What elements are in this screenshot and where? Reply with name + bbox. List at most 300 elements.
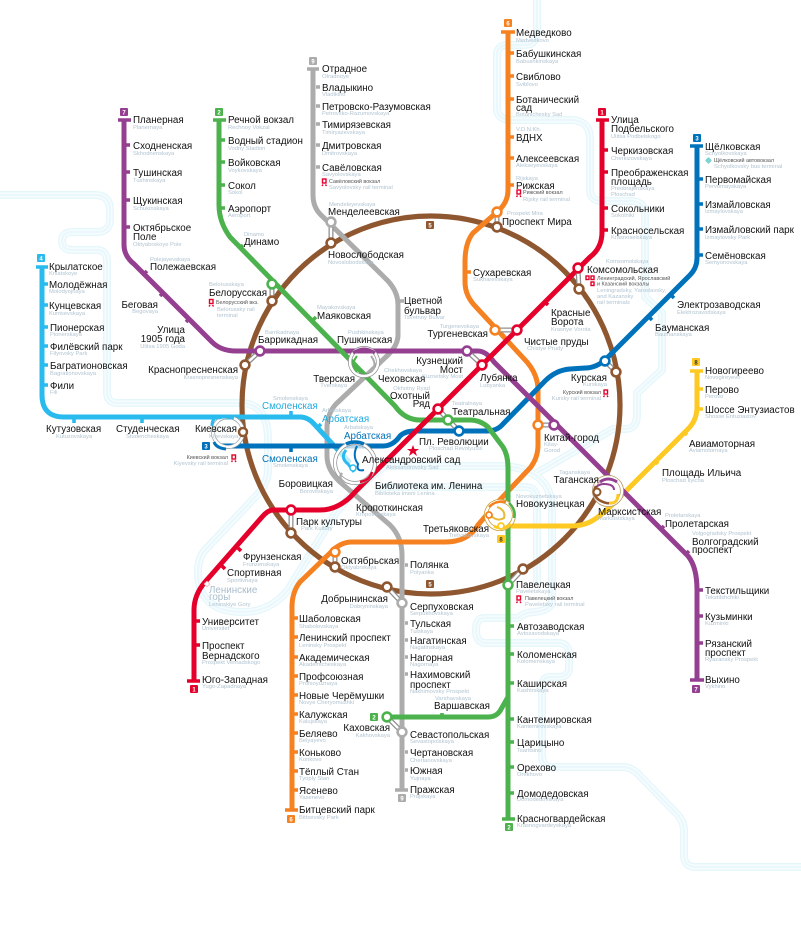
stations: line 3: Первомайская: [705, 175, 771, 186]
stations: line 6: Yasenevo: [299, 795, 324, 801]
stations: line 8: Ploschad Ilyicha: [662, 478, 705, 484]
stations: line 1: Чистые пруды: [524, 337, 589, 348]
stations: line 6: Китай-город: [544, 433, 599, 444]
stations: line 7 north: Тушинская: [133, 168, 182, 179]
stations: line 7 north: Поле: [133, 232, 157, 243]
stations: line 5: Добрынинская: [321, 594, 388, 605]
stations: line 7 centre and south-east: Мост: [440, 365, 464, 376]
stations: line 3: Izmaylovskaya: [705, 209, 744, 215]
stations: line 6: Новые Черёмушки: [299, 691, 384, 702]
stations: line 1: Preobrajenskaya: [611, 186, 655, 192]
stations: line 6: Проспект Мира: [502, 217, 572, 228]
stations: line 4: Смоленская: [262, 401, 318, 412]
stations: line 6: сад: [516, 103, 532, 114]
stations: line 2 south: [517, 622, 606, 829]
line number badges: 3: [695, 136, 699, 142]
stations: line 8: Марксистская: [598, 507, 661, 518]
stations: line 7 centre and south-east: проспект: [705, 648, 746, 659]
stations: line 3: [262, 142, 795, 469]
stations: line 7 centre and south-east: Taganskaya: [559, 470, 591, 476]
stations: line 9: Южная: [410, 766, 443, 777]
stations: line 7 north: Schukinskaya: [133, 206, 170, 212]
stations: line 7 centre and south-east: Kuznetsky Most: [422, 374, 463, 380]
stations: line 2: Тверская: [313, 374, 355, 385]
stations: line 5: Новослободская: [328, 250, 404, 261]
stations: line 4: Studencheskaya: [126, 434, 170, 440]
stations: line 2: Белорусская: [209, 288, 267, 299]
stations: line 6: Беляево: [299, 729, 338, 740]
stations: line 1: Фрунзенская: [243, 552, 302, 563]
stations: line 8: Авиамоторная: [689, 439, 755, 450]
stations: line 4: Kiyevsky rail terminal: [174, 461, 228, 467]
stations: line 9: Каховская: [343, 723, 390, 734]
stations: line 2 south: Царицыно: [517, 738, 565, 749]
line number badges: 5: [428, 224, 432, 230]
stations: line 2: Rechnoy Vokzal: [228, 125, 270, 131]
stations: line 1: Университет: [202, 617, 260, 628]
stations: line 2 south: Каширская: [517, 679, 567, 690]
stations: line 3: Щёлковская: [705, 142, 760, 153]
stations: line 1: площадь: [611, 177, 652, 188]
stations: line 7 centre and south-east: Tekstilshchiki: [705, 595, 739, 601]
stations: line 3: Kursky rail terminal: [552, 396, 601, 402]
stations: line 6: Botanichesky Sad: [516, 112, 562, 118]
stations: line 2: Teatralnaya: [452, 401, 483, 407]
stations: line 1: Universitet: [202, 626, 230, 632]
stations: line 9: Серпуховская: [410, 602, 474, 613]
stations: line 1: Komsomolskaya: [606, 259, 649, 265]
stations: line 7 north: Begovaya: [132, 309, 159, 315]
stations: line 6: Tretyakovskaya: [449, 533, 490, 539]
stations: line 3: Ploschad Revolyutsii: [429, 446, 482, 452]
stations: line 1: Вернадского: [202, 651, 260, 662]
stations: line 7 centre and south-east: Таганская: [554, 475, 599, 486]
stations: line 1: [202, 115, 688, 690]
line number badges: 8: [694, 360, 698, 366]
stations: line 2: [209, 115, 585, 591]
stations: line 9: Tulskaya: [410, 629, 434, 635]
stations: line 9: Дмитровская: [322, 141, 381, 152]
stations: line 2 south: Krasnogvardeyskaya: [517, 823, 572, 829]
stations: line 9: Prajskaya: [410, 794, 436, 800]
stations: line 2: Sokol: [228, 190, 243, 196]
stations: line 4: Fili: [50, 390, 57, 396]
stations: line 3: Курский вокзал: [563, 389, 601, 396]
stations: line 8: Marksistskaya: [598, 516, 635, 522]
stations: line 4: Студенческая: [116, 424, 180, 435]
stations: line 5: Павелецкий вокзал: [525, 595, 573, 602]
stations: line 2: Belorusskaya: [209, 282, 245, 288]
stations: line 2: Театральная: [452, 407, 510, 418]
stations: line 9: [279, 64, 490, 800]
stations: line 4: Pionerskaya: [50, 332, 83, 338]
stations: line 2 south: Kantemirovskaya: [517, 724, 562, 730]
stations: line 2: Mayakovskaya: [317, 305, 356, 311]
stations: line 7 north: Планерная: [133, 115, 184, 126]
stations: line 1: Проспект: [202, 641, 245, 652]
stations: line 6: Akademicheskaya: [299, 662, 347, 668]
stations: line 6: Рижский вокзал: [523, 189, 563, 196]
stations: line 9: Севастопольская: [410, 730, 489, 741]
stations: line 9: Тимирязевская: [322, 120, 391, 131]
stations: line 7 north: Сходненская: [133, 141, 192, 152]
stations: line 9: Полянка: [410, 560, 449, 571]
stations: line 1: Ряд: [413, 399, 430, 410]
stations: line 7 centre and south-east: Волгоградский: [692, 537, 759, 548]
stations: line 1: Ленинградский, Ярославский: [597, 275, 670, 282]
stations: line 2: terminal: [217, 313, 238, 319]
line number badges: 4: [39, 256, 43, 262]
line 5 circle: [242, 216, 620, 594]
stations: line 4: Aleksandrovsky Sad: [386, 465, 439, 471]
stations: line 7 north: Беговая: [121, 300, 158, 311]
stations: line 6: Leninsky Prospekt: [299, 643, 347, 649]
stations: line 7 centre and south-east: Текстильщики: [705, 586, 769, 597]
stations: line 4: Bagrationovskaya: [50, 371, 97, 377]
stations: line 6: Тёплый Стан: [299, 767, 359, 778]
stations: line 1: Парк культуры: [296, 517, 362, 528]
stations: line 1: Подбельского: [611, 124, 675, 135]
line number badges: 2: [372, 716, 376, 722]
stations: line 9: Тульская: [410, 619, 451, 630]
stations: line 2 south: Domodedovskaya: [517, 797, 564, 803]
stations: line 7 north: Polejayevskaya: [150, 257, 191, 263]
stations: line 9: Боровицкая: [279, 479, 333, 490]
stations: line 9: Нагорная: [410, 653, 453, 664]
stations: line 4: Smolenskaya: [273, 396, 309, 402]
line number badges: 7: [122, 110, 126, 116]
stations: line 6: Ботанический: [516, 95, 579, 106]
stations: line 7 north: Ulitsa 1905 Goda: [140, 344, 186, 350]
stations: line 3: Arbatskaya: [344, 425, 374, 431]
stations: line 2 south: Коломенская: [517, 650, 577, 661]
stations: line 1: Kropotkinskaya: [356, 512, 396, 518]
stations: line 6: Babushkinskaya: [516, 59, 559, 65]
stations: line 1: Улица: [611, 115, 639, 126]
stations: line 9: Nagornaya: [410, 662, 439, 668]
stations: line 6: Sukharevskaya: [473, 277, 513, 283]
stations: line 1: Ленинские: [209, 585, 258, 596]
stations: line 7 centre and south-east: Kuzminki: [705, 621, 729, 627]
stations: line 7 north: Щукинская: [133, 196, 183, 207]
stations: line 4: Kutuzovskaya: [56, 434, 93, 440]
line number badges: 3: [204, 444, 208, 450]
stations: line 3: Pervomayskaya: [705, 184, 747, 190]
stations: line 4: Kuntsevskaya: [49, 311, 86, 317]
stations: line 1: Prospekt Vernadskogo: [202, 660, 260, 666]
stations: line 1: Sokolniki: [611, 213, 634, 219]
stations: line 7 centre and south-east: Volgogradsky Prospekt: [692, 531, 752, 537]
stations: line 4: Багратионовская: [50, 361, 128, 372]
stations: line 3: Elektrozavodskaya: [677, 310, 726, 316]
stations: line 2: Речной вокзал: [228, 115, 294, 126]
line 9 grey: [307, 69, 408, 790]
stations: line 7 centre and south-east: Кузьминки: [705, 612, 753, 623]
stations: line 7 north: Улица: [157, 325, 186, 336]
stations: line 9: Менделеевская: [328, 207, 400, 218]
stations: line 9: Borovitskaya: [300, 489, 334, 495]
stations: line 6: Рижская: [516, 181, 555, 192]
line number badges: 6: [289, 818, 293, 824]
stations: line 7 north: [121, 115, 318, 381]
stations: line 3: Schyolkovskaya: [705, 151, 747, 157]
stations: line 9: Савёловский вокзал: [329, 178, 380, 185]
stations: line 1: Охотный: [390, 391, 430, 402]
stations: line 6: Sviblovo: [516, 82, 538, 88]
stations: line 6: Профсоюзная: [299, 672, 363, 683]
stations: line 8: Перово: [705, 385, 739, 396]
stations: line 1: Красносельская: [611, 226, 684, 237]
stations: line 1: Ploschad: [611, 192, 635, 198]
stations: line 1: Frunzenskaya: [243, 562, 280, 568]
stations: line 1: Комсомольская: [587, 265, 658, 276]
stations: line 7 north: Oktyabrskoye Pole: [133, 242, 182, 248]
stations: line 1: Leninskiye Gory: [209, 602, 251, 608]
icon: bus terminal: [705, 157, 712, 164]
stations: line 8: Shosse Entuziastov: [705, 414, 756, 420]
stations: line 4: Molodyojnaya: [49, 289, 86, 295]
stations: line 5: Paveletskaya: [516, 589, 551, 595]
stations: line 9: проспект: [410, 680, 451, 691]
stations: line 7 centre and south-east: Ryazansky Prospekt: [705, 657, 758, 663]
stations: line 9: Tsvetnoy Bulvar: [404, 315, 445, 321]
stations: line 9: Chekhovskaya: [384, 368, 423, 374]
stations: line 6: Prospekt Mira: [507, 211, 544, 217]
stations: line 9: Mendeleyevskaya: [329, 202, 376, 208]
stations: line 1: Преображенская: [611, 168, 688, 179]
stations: line 6: Medvedkovo: [516, 38, 549, 44]
stations: line 1: and Kazansky: [597, 294, 634, 300]
stations: line 9: Цветной: [404, 296, 442, 307]
stations: line 6: Belyayevo: [299, 738, 326, 744]
stations: line 1: Krasnoselskaya: [611, 235, 653, 241]
line number badges: 2: [507, 826, 511, 832]
stations: line 1: горы: [209, 592, 230, 603]
stations: line 2 south: Avtozavodskaya: [517, 631, 560, 637]
stations: line 5: Novoslobodskaya: [328, 260, 375, 266]
stations: line 5: Dobryninskaya: [350, 604, 389, 610]
stations: line 1: Sportivnaya: [227, 578, 258, 584]
stations: line 7 north: Баррикадная: [258, 335, 318, 346]
stations: line 2: Dinamo: [244, 232, 264, 238]
line number badges: 2: [217, 110, 221, 116]
stations: line 9: Nagatinskaya: [410, 645, 446, 651]
line number badges: 7: [694, 688, 698, 694]
stations: line 9: Нагатинская: [410, 636, 467, 647]
stations: line 4: Филёвский парк: [50, 342, 123, 353]
stations: line 1: Okhotny Ryad: [393, 386, 430, 392]
stations: line 2 south: Орехово: [517, 763, 557, 774]
line number badges: 8: [499, 538, 503, 544]
hub: Arbatskaya / Aleksandrovsky Sad: [335, 442, 375, 483]
stations: line 9: Savyolovsky rail terminal: [329, 185, 393, 191]
stations: line 1: Кропоткинская: [356, 503, 423, 514]
stations: line 1: Lubyanka: [480, 383, 506, 389]
stations: line 7 centre and south-east: Рязанский: [705, 639, 752, 650]
stations: line 7 north: Полежаевская: [150, 262, 216, 273]
stations: line 9: Чертановская: [410, 748, 473, 759]
hub: Taganskaya / Marksistskaya: [594, 477, 622, 505]
stations: line 3: Арбатская: [344, 431, 391, 442]
stations: line 1: Библиотека им. Ленина: [375, 481, 483, 492]
stations: line 2: Сокол: [228, 181, 256, 192]
stations: line 1: Ворота: [551, 317, 584, 328]
stations: line 6: Третьяковская: [423, 524, 489, 535]
stations: line 3: Измайловский парк: [705, 225, 795, 236]
stations: line 2: Войковская: [228, 158, 281, 169]
stations: line 3: Kurskaya: [583, 382, 608, 388]
stations: line 3: Пл. Революции: [419, 437, 489, 448]
stations: line 9: Timiryazevskaya: [322, 130, 366, 136]
hub: Tretyakovskaya / Novokuznetskaya: [486, 501, 514, 529]
line number badges: 1: [192, 688, 196, 694]
stations: line 2 south: Домодедовская: [517, 789, 589, 800]
stations: line 1: и Казанский вокзалы: [597, 280, 649, 288]
stations: line 6: [299, 28, 599, 821]
stations: line 9: Serpukhovskaya: [410, 611, 454, 617]
stations: line 4: [46, 262, 461, 471]
line 7 purple: [118, 120, 704, 680]
stations: line 6: Ленинский проспект: [299, 633, 391, 644]
icon: red star (Kremlin): [407, 445, 419, 456]
stations: line 1: Park Kultury: [301, 526, 333, 532]
stations: line 3: Izmaylovsky Park: [705, 235, 750, 241]
stations: line 1: Chistye Prudy: [527, 346, 563, 352]
stations: line 7 north: Planernaya: [133, 125, 163, 131]
stations: line 6: Калужская: [299, 710, 348, 721]
stations: line 2 south: Orekhovo: [517, 772, 542, 778]
stations: line 8: Novogireyevo: [705, 375, 740, 381]
stations: line 9: Пражская: [410, 785, 455, 796]
stations: line 2: Новокузнецкая: [516, 499, 585, 510]
stations: line 8: Perovo: [705, 394, 723, 400]
stations: line 6: Oktyabrskaya: [341, 565, 377, 571]
line 6 orange: [285, 32, 538, 810]
stations: line 2: Аэропорт: [228, 204, 272, 215]
stations: line 6: Shabolovskaya: [299, 624, 339, 630]
stations: line 1: Biblioteka imeni Lenina: [375, 491, 435, 497]
stations: line 2: Aeroport: [228, 213, 251, 219]
stations: line 7 centre and south-east: проспект: [692, 545, 733, 556]
stations: line 9: Варшавская: [434, 701, 490, 712]
stations: line 2 south: Kashirskaya: [517, 688, 549, 694]
line number badges: 6: [506, 22, 510, 28]
stations: line 6: Октябрьская: [341, 556, 399, 567]
stations: line 3: Schyolkovsky bus terminal: [714, 164, 782, 170]
stations: line 2: Voykovskaya: [228, 168, 263, 174]
line 4 light blue: [36, 267, 350, 463]
stations: line 1: Лубянка: [480, 373, 518, 384]
stations: line 9: Otradnoye: [322, 74, 349, 80]
stations: line 7 centre and south-east: [337, 330, 769, 690]
stations: line 3: Baumanskaya: [655, 332, 693, 338]
stations: line 4: Kiyevskaya: [209, 434, 239, 440]
stations: line 7 centre and south-east: Proletarskaya: [665, 513, 701, 519]
stations: line 6: V.D.N.Kh.: [516, 127, 542, 133]
stations: line 7 north: Краснопресненская: [148, 365, 238, 376]
stations: line 8: Площадь Ильича: [662, 468, 742, 479]
stations: line 6: Konkovo: [299, 757, 322, 763]
icon: Leninskie Gory marker: [204, 581, 210, 587]
stations: line 9: Nakhimovsky Prospekt: [410, 689, 469, 695]
stations: line 4: Filyovsky Park: [50, 351, 87, 357]
stations: line 6: Алексеевская: [516, 154, 579, 165]
stations: line 4: Киевский вокзал: [187, 454, 228, 461]
stations: line 5: Paveletsky rail terminal: [525, 602, 585, 608]
stations: line 6: ВДНХ: [516, 133, 543, 144]
stations: line 6: Бабушкинская: [516, 49, 581, 60]
stations: line 4: Киевская: [195, 424, 237, 435]
stations: line 9: бульвар: [404, 306, 441, 317]
line 3 blue: [218, 146, 703, 452]
stations: line 6: Rijskaya: [516, 176, 539, 182]
stations: line 9: Savyolovskaya: [322, 172, 361, 178]
stations: line 9: Чеховская: [378, 374, 425, 385]
stations: line 3: Щёлковский автовокзал: [714, 157, 774, 164]
stations: line 6: Bittsevsky Park: [299, 815, 339, 821]
stations: line 9: Владыкино: [322, 83, 374, 94]
stations: line 6: Turgenevskaya: [440, 324, 480, 330]
icons: rail terminals: [209, 179, 608, 603]
stations: line 6: Kitay-: [544, 442, 559, 448]
stations: line 8: [598, 366, 795, 522]
stations: line 2 south: Красногвардейская: [517, 814, 606, 825]
stations: line 9: Отрадное: [322, 64, 368, 75]
line 2 green: [213, 120, 515, 819]
stations: line 6: Gorod: [544, 448, 560, 454]
stations: line 7 north: Skhodnenskaya: [133, 151, 175, 157]
stations: line 6: Kalujskaya: [299, 719, 328, 725]
stations: line 9: Sevastopolskaya: [410, 739, 455, 745]
stations: line 2: Novokuznetskaya: [516, 494, 563, 500]
stations: line 2: Tverskaya: [320, 383, 348, 389]
line number badges: 9: [311, 60, 315, 66]
stations: line 1: Юго-Западная: [202, 675, 268, 686]
stations: line 6: Свиблово: [516, 72, 561, 83]
stations: line 7 centre and south-east: Пролетарская: [665, 519, 729, 530]
stations: line 9: Yujnaya: [410, 776, 431, 782]
stations: line 6: Коньково: [299, 748, 342, 759]
stations: line 7 centre and south-east: Кузнецкий: [416, 356, 463, 367]
stations: line 9: Dmitrovskaya: [322, 151, 358, 157]
stations: line 9: Нахимовский: [410, 670, 470, 681]
stations: line 7 centre and south-east: Пушкинская: [337, 335, 392, 346]
stations: line 9: Polyanka: [410, 570, 435, 576]
stations: line 8: Шоссе Энтузиастов: [705, 405, 795, 416]
line 1 red: [187, 120, 609, 681]
stations: line 1: Yugo-Zapadnaya: [202, 684, 247, 690]
stations: line 1: Leningradsky, Yaroslavsky,: [597, 288, 667, 294]
stations: line 6: Ясенево: [299, 786, 338, 797]
stations: line 4: Фили: [50, 381, 74, 392]
stations: line 2 south: Кантемировская: [517, 715, 592, 726]
stations: line 3: Электрозаводская: [677, 300, 761, 311]
stations: line 1: Красные: [551, 308, 591, 319]
stations: line 3: Измайловская: [705, 200, 771, 211]
stations: line 4: Krilatskoye: [49, 271, 77, 277]
stations: line 4: Кутузовская: [46, 424, 101, 435]
stations: line 7 north: Октябрьское: [133, 223, 192, 234]
line number badges: 1: [600, 110, 604, 116]
stations: line 4: Пионерская: [50, 323, 104, 334]
stations: line 4: Молодёжная: [49, 280, 107, 291]
stations: line 7 north: Tushinskaya: [133, 178, 166, 184]
stations: line 2: Динамо: [244, 237, 280, 248]
stations: line 2 south: Tsaritsino: [517, 748, 541, 754]
stations: line 7 north: Krasnopresnenskaya: [184, 375, 239, 381]
stations: line 9: Kakhovskaya: [356, 733, 391, 739]
stations: line 1: Ulitsa Podbelskogo: [611, 134, 661, 140]
